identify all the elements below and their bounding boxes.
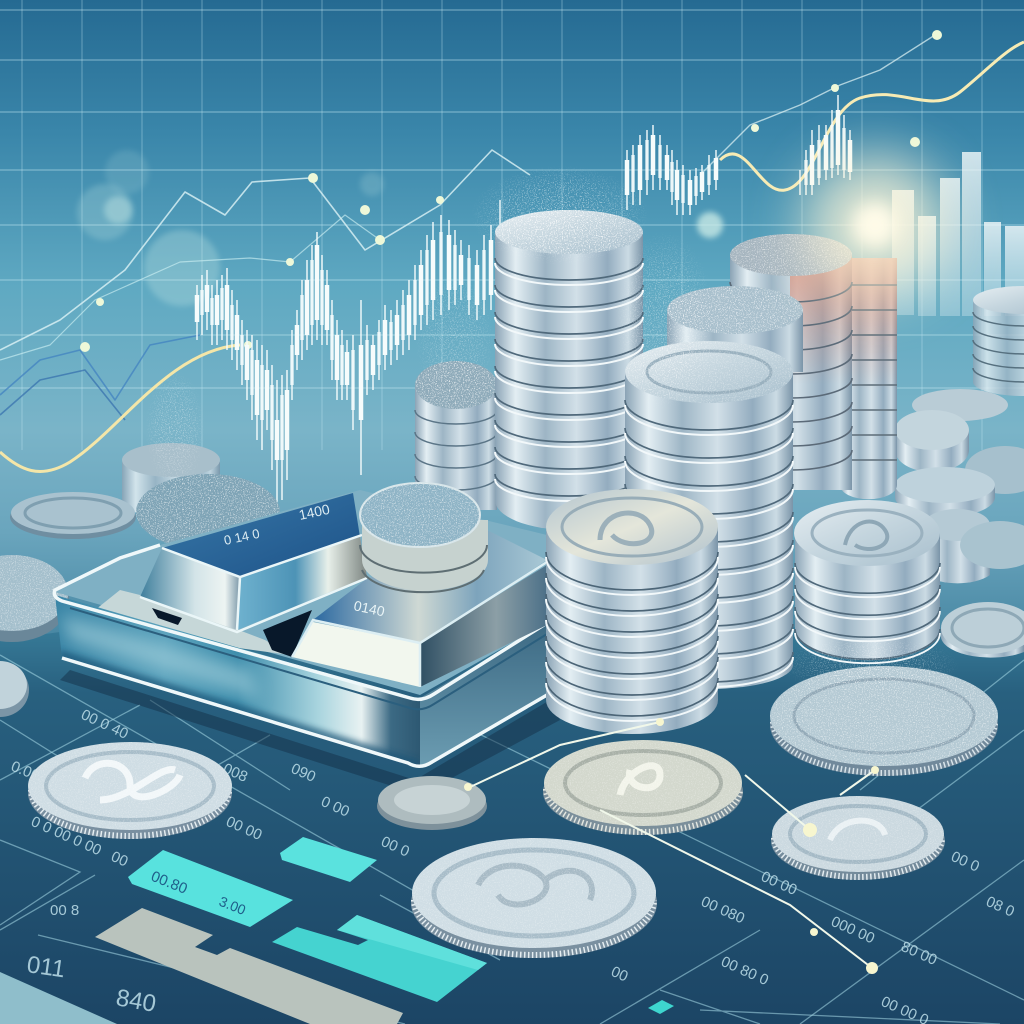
coin stack: far right mini [924, 509, 990, 583]
coin: large front [411, 838, 657, 958]
table labels: 000 00 [828, 913, 877, 947]
teal stepped bar [272, 915, 487, 1002]
coin stack: far right [973, 286, 1024, 396]
coin stack: on tray [360, 483, 488, 592]
table labels: 00 [608, 963, 631, 985]
line chart: dark lower [0, 370, 125, 420]
coin stack: mid left [415, 361, 497, 510]
pale bar bottom left [0, 972, 117, 1024]
line charts [0, 35, 1024, 471]
coin: right mid [895, 485, 995, 517]
table labels [9, 706, 1017, 1024]
tray with silver bars [54, 490, 560, 795]
table labels: 0 0 00 0 00 [28, 813, 104, 859]
coin stack: center tall [495, 210, 643, 530]
table surface [0, 600, 1024, 1024]
coin: back right [965, 446, 1024, 494]
bar chart: pale background columns [892, 152, 1024, 316]
shadow [60, 670, 560, 795]
tray reflections [60, 615, 420, 770]
beige bar [95, 908, 403, 1024]
coin: right pile top [895, 410, 969, 450]
teal bar with values: 00.80 [149, 868, 190, 898]
coin stack: front [546, 489, 718, 734]
line chart: blue lower [0, 335, 200, 400]
table labels: 840 [114, 984, 158, 1018]
connector lines [464, 718, 879, 974]
line chart: golden curve right [720, 42, 1024, 190]
silver bar: right [292, 530, 547, 687]
silver bar: left: 0 14 0 [223, 526, 261, 548]
grid lines [0, 0, 1024, 450]
coin: left back flat [10, 492, 136, 539]
line chart: white trend [0, 150, 530, 350]
coin: bottom left [28, 742, 232, 839]
coin stack: back red [730, 234, 852, 490]
coin: lower left edge [0, 661, 29, 717]
line chart: secondary [0, 215, 380, 360]
coin: right front [941, 602, 1024, 658]
table labels: 0.00 80 [9, 758, 61, 792]
table labels: 00 080 [698, 893, 747, 927]
coin stack: right [794, 500, 940, 663]
lower bar under left bar [95, 590, 290, 655]
coin: far back [912, 389, 1008, 421]
table labels: 00 0 [378, 833, 412, 861]
silver bar: left [140, 493, 367, 632]
table labels: 00 00 [758, 868, 800, 899]
table labels: 00 8 [50, 902, 79, 919]
table labels: 80 00 [898, 938, 940, 969]
tray front wall [55, 595, 420, 768]
coin: right flat [771, 796, 945, 880]
table labels: 00 80 0 [718, 953, 771, 989]
coin stack: short back [667, 286, 803, 372]
candlestick chart [197, 95, 850, 520]
table labels: 008 [220, 760, 250, 786]
table grid lines [0, 655, 1024, 1024]
silver bar: right: 0140 [352, 597, 386, 619]
coin: right edge [960, 521, 1024, 569]
silver dust particles [145, 165, 960, 695]
coin: small [377, 776, 487, 830]
coin stack: back orange [840, 258, 897, 499]
table labels: 08 0 [983, 893, 1017, 921]
coin stack: tall middle [625, 341, 793, 689]
tray rim [54, 545, 547, 766]
left coins [0, 443, 280, 717]
far right background coin pile [895, 286, 1024, 517]
teal bar small [280, 837, 377, 882]
table labels: 0 00 [318, 793, 352, 821]
dark gap between bars [263, 610, 312, 657]
teal bar with values: 3.00 [217, 893, 248, 918]
table labels: 00 0 40 [78, 706, 131, 743]
silver bar: left: 1400 [297, 501, 331, 523]
table labels: 011 [25, 951, 67, 983]
table labels: 00 00 [223, 813, 265, 844]
tray interior [55, 490, 547, 695]
coin: grainy left [136, 474, 280, 550]
chart nodes [80, 30, 942, 352]
line chart: upper right [700, 35, 935, 175]
bokeh lights [77, 150, 723, 306]
coin: dollar center [543, 740, 743, 835]
sun glare [805, 155, 945, 295]
tray right wall [420, 625, 547, 768]
coin: right mid top [895, 467, 995, 503]
small teal marker [648, 1000, 674, 1014]
line chart: golden curve left [0, 345, 240, 471]
table labels: 090 [288, 760, 318, 786]
coin: left edge [0, 555, 69, 642]
table labels: 00 [108, 848, 131, 870]
dark under left bar [152, 608, 182, 625]
coin stack: left back [122, 443, 220, 518]
table labels: 00 0 [948, 848, 982, 876]
teal bar with values [128, 850, 293, 927]
connector nodes [464, 783, 472, 791]
coin: grainy flat right [770, 666, 998, 776]
coin: right pile [895, 430, 969, 472]
